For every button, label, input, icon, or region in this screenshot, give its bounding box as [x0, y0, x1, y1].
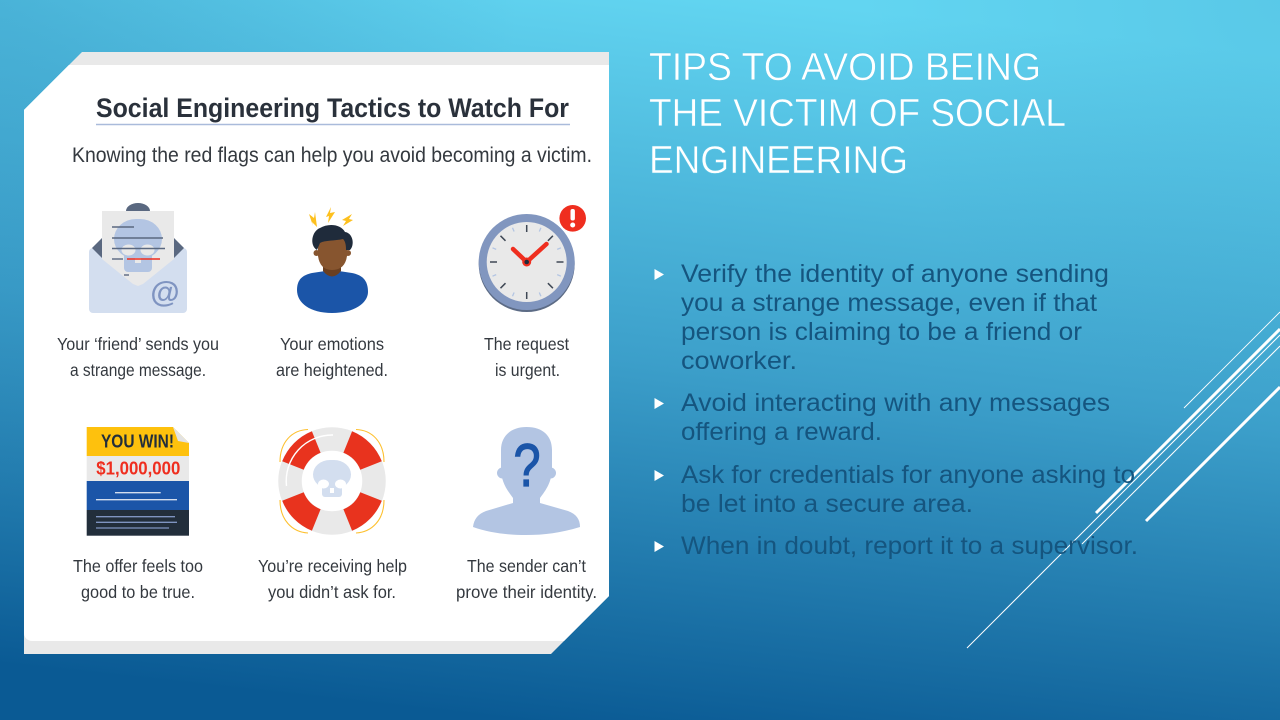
icon: lifebuoy with skull: [280, 430, 384, 533]
label: strange message: a strange message.: [70, 360, 206, 380]
label: unproven identity: prove their identity.: [456, 582, 597, 602]
icon: envelope with skull: [89, 203, 187, 313]
bullet: verify identity: coworker.: [681, 347, 797, 375]
title: TIPS TO AVOID BEING: [649, 46, 1041, 89]
icon: stressed person: [297, 207, 368, 313]
icon: unknown person silhouette: [473, 427, 580, 535]
panel subtitle: Knowing the red flags can help you avoid becoming a victim.: [72, 144, 592, 167]
title: THE VICTIM OF SOCIAL: [649, 92, 1066, 135]
icon: you win document: $1,000,000: [96, 458, 180, 478]
bullet: ask for credentials: [654, 461, 1135, 518]
bullet: verify identity: person is claiming to be a friend or: [681, 318, 1082, 346]
bullet: verify identity: Verify the identity of anyone sending: [681, 260, 1109, 288]
icon: you win document: [87, 427, 189, 536]
bullet: avoid rewards: [654, 389, 1110, 446]
label: strange message: Your ‘friend’ sends you: [57, 334, 219, 354]
bullet: avoid rewards: Avoid interacting with any messages: [681, 389, 1110, 417]
bullet: verify identity: you a strange message, even if that: [681, 289, 1097, 317]
label: urgent request: The request: [484, 334, 569, 354]
bullet: ask for credentials: Ask for credentials for anyone asking to: [681, 461, 1135, 489]
label: strange message: [57, 334, 219, 380]
label: unsolicited help: [258, 556, 407, 602]
label: unsolicited help: You’re receiving help: [258, 556, 407, 576]
bullet list: [654, 260, 1138, 560]
label: too good to be true: good to be true.: [81, 582, 195, 602]
label: too good to be true: The offer feels too: [73, 556, 203, 576]
title: [649, 46, 1066, 182]
label: heightened emotions: Your emotions: [280, 334, 384, 354]
bullet: report to supervisor: When in doubt, report it to a supervisor.: [681, 532, 1138, 560]
label: unproven identity: [456, 556, 597, 602]
decorative diagonal lines: [967, 312, 1280, 648]
icon: unknown person silhouette: ?: [514, 432, 540, 499]
bullet: avoid rewards: offering a reward.: [681, 418, 882, 446]
label: urgent request: is urgent.: [495, 360, 560, 380]
icon: you win document: YOU WIN!: [101, 432, 174, 452]
panel: social engineering tactics: [24, 52, 609, 654]
icon: clock with alert: [479, 205, 586, 312]
icon: envelope with skull: @: [150, 276, 180, 309]
label: unproven identity: The sender can’t: [467, 556, 586, 576]
label: too good to be true: [73, 556, 203, 602]
panel heading: Social Engineering Tactics to Watch For: [96, 93, 569, 123]
bullet: ask for credentials: be let into a secure area.: [681, 490, 973, 518]
bullet: verify identity: [654, 260, 1109, 375]
label: heightened emotions: [276, 334, 388, 380]
label: heightened emotions: are heightened.: [276, 360, 388, 380]
title: ENGINEERING: [649, 139, 908, 182]
label: urgent request: [484, 334, 569, 380]
label: unsolicited help: you didn’t ask for.: [268, 582, 396, 602]
